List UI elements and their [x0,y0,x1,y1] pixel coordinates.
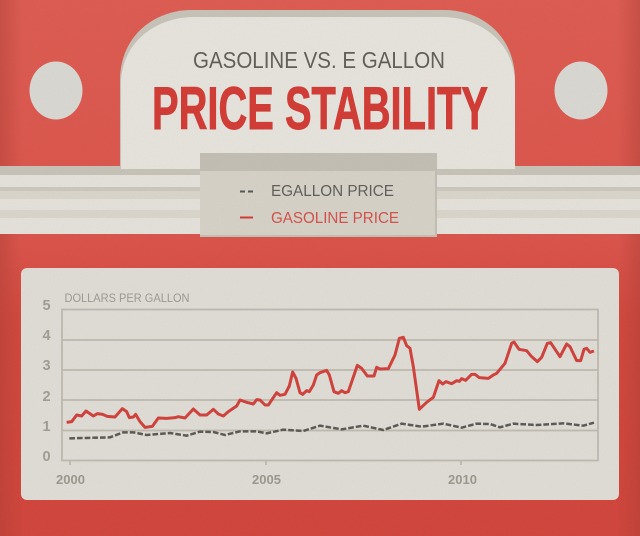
x axis labels: 2000 [56,472,85,487]
y axis labels: 2 [42,389,51,405]
header tab [120,10,515,172]
legend: egallon: EGALLON PRICE [271,183,394,200]
x axis labels: 2005 [252,472,281,487]
plot grid [62,310,598,465]
chart panel [21,268,619,500]
horizontal band [0,166,640,234]
subtitle: GASOLINE VS. E GALLON [193,47,445,73]
x axis labels [56,472,477,487]
y axis labels [42,298,51,465]
line: egallon price [69,423,594,438]
y axis labels: 5 [42,298,51,314]
x axis labels: 2010 [448,472,477,487]
legend box [200,153,437,237]
icon: left hole [30,62,82,120]
icon: right hole [554,62,608,120]
axis title: DOLLARS PER GALLON [64,293,190,305]
y axis labels: 4 [42,328,51,344]
legend: gasoline: GASOLINE PRICE [271,210,399,227]
y axis labels: 1 [42,419,51,435]
y axis labels: 3 [42,358,51,374]
line: gasoline price [67,337,594,427]
y axis labels: 0 [42,449,51,465]
